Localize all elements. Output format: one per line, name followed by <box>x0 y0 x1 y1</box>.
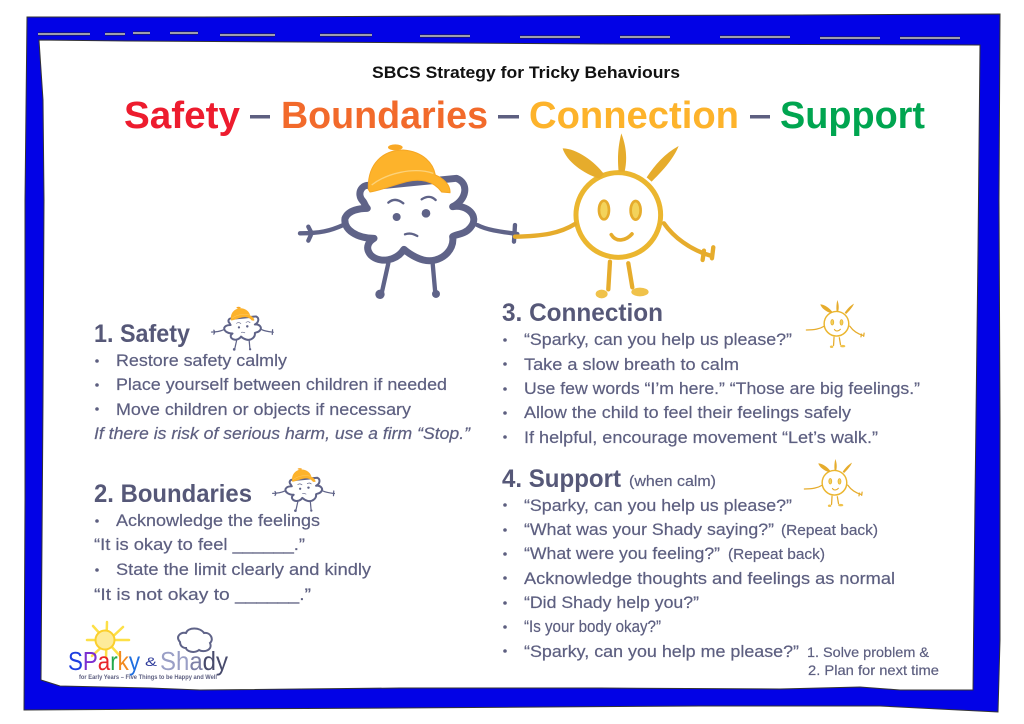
text: support list: “Sparky, can you help us please?” <box>524 496 792 515</box>
text: support list: “What were you feeling?” <box>524 544 720 563</box>
icon: logo cloud <box>178 628 212 652</box>
heading: Safety Boundaries Connection Support: Connection <box>529 95 739 137</box>
text: support list: 2. Plan for next time <box>808 662 939 678</box>
heading: 4. Support: 4. Support <box>502 465 622 493</box>
text: boundaries list: “It is not okay to ______.” <box>94 585 311 604</box>
text: safety list: Move children or objects if necessary <box>116 400 412 419</box>
heading: Safety Boundaries Connection Support: Boundaries <box>281 95 488 137</box>
text: Sparky: SParky <box>68 646 140 676</box>
text: connection list <box>503 330 920 447</box>
title: SBCS Strategy for Tricky Behaviours <box>372 64 680 82</box>
text: support list: 1. Solve problem & <box>807 644 930 660</box>
icon: small cloud <box>211 307 273 351</box>
text: boundaries list: “It is okay to feel ______.” <box>94 535 305 554</box>
text: connection list: Take a slow breath to calm <box>524 355 739 374</box>
text: boundaries list: State the limit clearly and kindly <box>116 560 372 579</box>
heading: 1. Safety: 1. Safety <box>94 320 190 348</box>
icon: small sun <box>806 300 864 348</box>
text: support list: (Repeat back) <box>728 546 825 563</box>
icon: logo sun <box>87 622 129 658</box>
text: connection list: Allow the child to feel their feelings safely <box>524 403 852 422</box>
text: when calm: (when calm) <box>629 473 716 490</box>
text: safety list: Place yourself between children if needed <box>116 375 447 394</box>
text: connection list: “Sparky, can you help us please?” <box>524 330 792 349</box>
text: safety list <box>94 351 471 443</box>
heading: Safety Boundaries Connection Support <box>124 95 925 137</box>
text: support list <box>503 496 939 678</box>
heading: Safety Boundaries Connection Support: Support <box>780 95 925 137</box>
illustration: Shady cloud and Sparky sun holding hands <box>300 133 713 299</box>
text: boundaries list: Acknowledge the feelings <box>116 511 320 530</box>
text: connection list: If helpful, encourage movement “Let’s walk.” <box>524 428 878 447</box>
panel: 4. Support <box>502 459 939 678</box>
text: safety list: If there is risk of serious harm, use a firm “Stop.” <box>94 424 471 443</box>
heading: 2. Boundaries: 2. Boundaries <box>94 480 252 508</box>
text: tagline: for Early Years – Five Things to be Happy and Well <box>79 674 217 681</box>
icon: small sun <box>804 459 862 507</box>
text: support list: “Sparky, can you help me please?” <box>524 642 799 661</box>
logo: Sparky and Shady <box>68 622 228 681</box>
text: boundaries list <box>94 511 372 604</box>
text: support list: “Did Shady help you?” <box>524 593 699 612</box>
heading: 3. Connection: 3. Connection <box>502 299 663 327</box>
panel: 3. Connection <box>502 299 920 447</box>
text: Shady: Shady <box>160 646 228 676</box>
text: support list: “Is your body okay?” <box>524 617 661 636</box>
text: support list: “What was your Shady saying?” <box>524 520 774 539</box>
text: support list: (Repeat back) <box>781 522 878 539</box>
icon: small cloud <box>273 468 334 512</box>
text: support list: Acknowledge thoughts and feelings as normal <box>524 569 895 588</box>
heading: Safety Boundaries Connection Support: Safety <box>124 95 240 137</box>
panel: 2. Boundaries <box>94 468 372 604</box>
panel: 1. Safety <box>94 307 471 443</box>
text: connection list: Use few words “I’m here.” “Those are big feelings.” <box>524 379 920 398</box>
text: ampersand: & <box>145 655 157 669</box>
text: safety list: Restore safety calmly <box>116 351 288 370</box>
